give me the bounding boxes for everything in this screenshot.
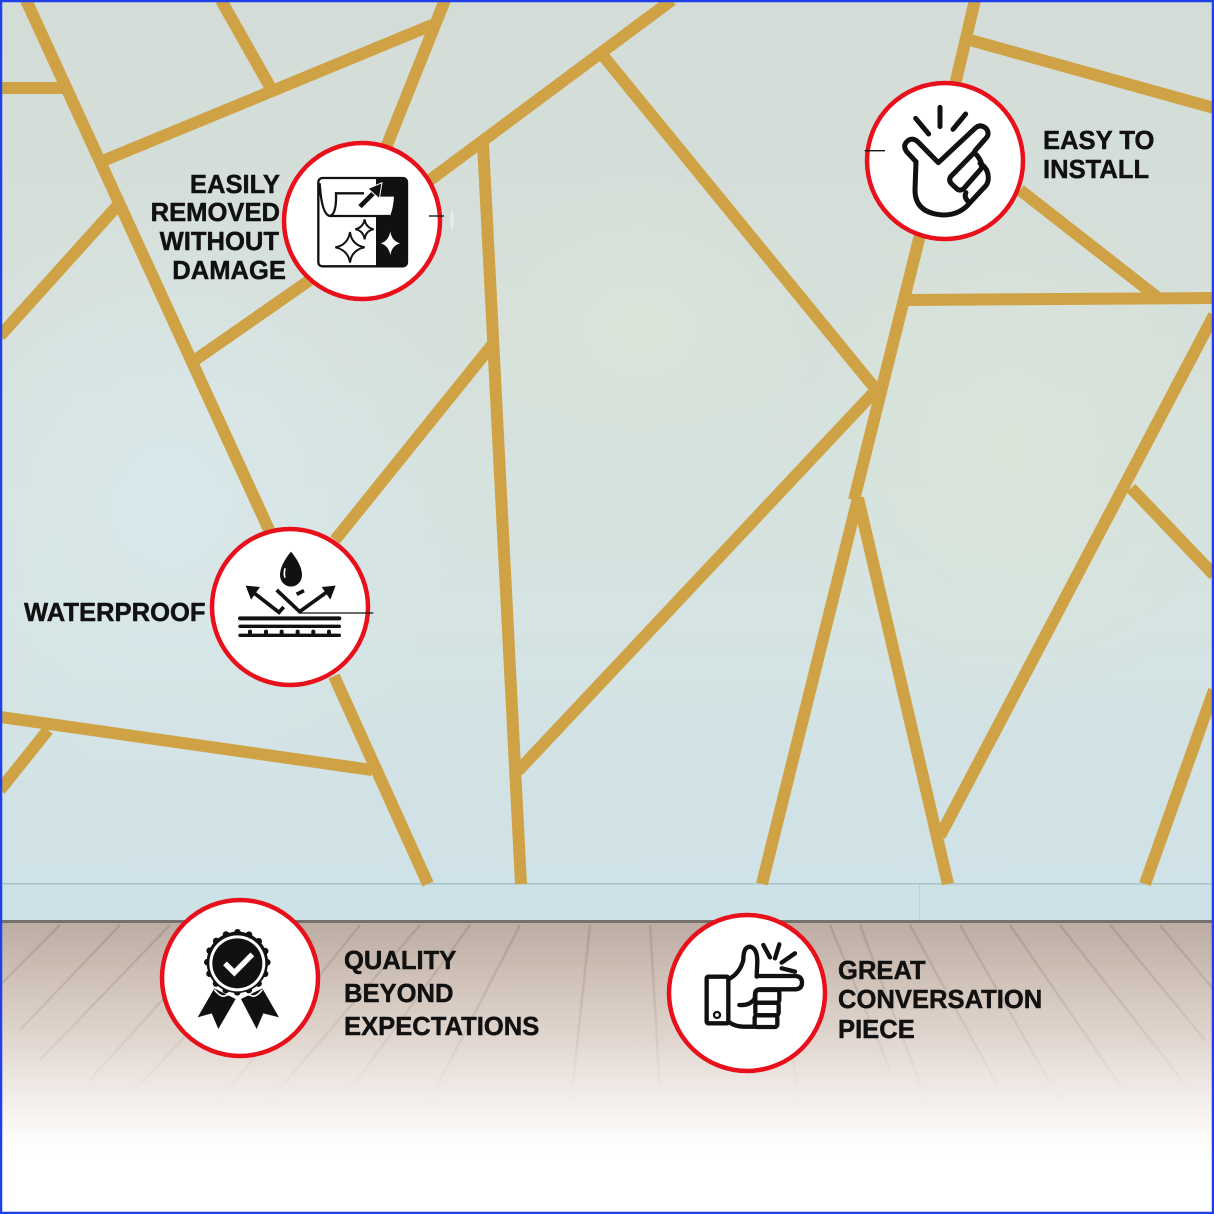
feature: quality beyond expectations [162,900,539,1056]
label: easily removed without damage [151,171,286,285]
label: easily removed without damage: DAMAGE [172,257,286,285]
feature: easy to install [865,83,1154,239]
icon: thumbs up snap hand [707,944,802,1027]
badge circle [212,529,368,685]
feature: waterproof [24,529,373,685]
label: quality beyond expectations [344,947,539,1041]
label: quality beyond expectations: EXPECTATIONS [344,1013,539,1041]
label: great conversation piece: PIECE [838,1016,915,1044]
icon: peeling sheet with sparkles [318,178,444,266]
icon: award rosette [198,932,279,1029]
label: great conversation piece [838,957,1042,1044]
label: quality beyond expectations: BEYOND [344,980,454,1008]
label: easy to install: EASY TO [1043,127,1154,155]
label: easily removed without damage: EASILY [190,171,280,199]
label: quality beyond expectations: QUALITY [344,947,456,975]
background: baseboard [0,883,1214,922]
badge circle [669,915,825,1071]
label: great conversation piece: GREAT [838,957,926,985]
label: easy to install: INSTALL [1043,156,1149,184]
badge circle [162,900,318,1056]
label: easily removed without damage: REMOVED [151,199,280,227]
background: wood floor [0,920,1214,1214]
feature: easily removed without damage [151,143,444,299]
label: easily removed without damage: WITHOUT [160,228,279,256]
gold tape lines [0,0,1214,884]
label: waterproof: WATERPROOF [24,599,206,627]
label: great conversation piece: CONVERSATION [838,986,1042,1014]
background: wall [0,0,1214,884]
feature: great conversation piece [669,915,1042,1071]
badge circle [867,83,1023,239]
icon: finger snap hand [865,107,988,215]
icon: water drop repelled by layers [240,552,373,635]
badge circle [284,143,440,299]
label: easy to install [1043,127,1154,184]
